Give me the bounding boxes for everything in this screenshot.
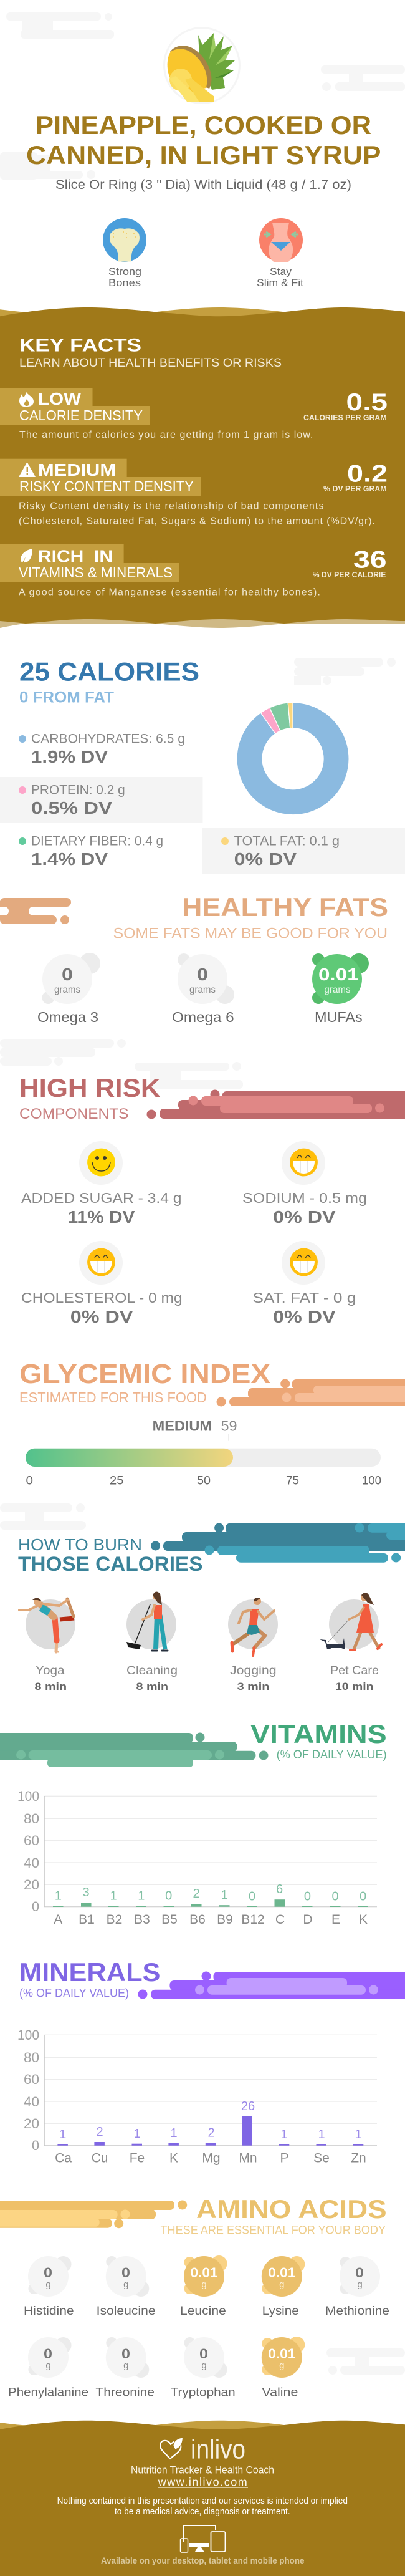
legend: carbohydrates xyxy=(19,732,185,766)
fact: rich in vitamins and minerals: % DV PER CALORIE xyxy=(313,571,386,579)
metric: omega 6: grams xyxy=(189,985,216,995)
metric: mufas: grams xyxy=(324,985,350,995)
metric: mufas xyxy=(312,953,369,1025)
gauge chart: 75 xyxy=(286,1474,299,1488)
metric: valine: 0.01 xyxy=(268,2346,295,2361)
activity label: cleaning: 8 min xyxy=(136,1681,168,1692)
metric: lysine: 0.01 xyxy=(268,2265,295,2280)
metric: methionine: g xyxy=(357,2279,363,2290)
gauge chart: 100 xyxy=(362,1474,381,1488)
bar chart: minerals: Cu xyxy=(92,2151,108,2166)
metric: threonine xyxy=(95,2337,155,2400)
heading xyxy=(19,1957,161,2000)
activity: cleaning xyxy=(126,1591,176,1651)
bar chart: minerals: 0 xyxy=(32,2138,39,2153)
bar chart: minerals: 1 xyxy=(318,2128,325,2141)
bar chart: minerals: 2 xyxy=(96,2125,103,2139)
heading xyxy=(161,2194,387,2237)
bar chart: vitamins: A xyxy=(54,1913,62,1927)
metric: methionine: 0 xyxy=(355,2265,364,2280)
bar chart: minerals: 1 xyxy=(280,2128,288,2141)
decoration: swoosh xyxy=(0,898,71,924)
tagline and url: www.inlivo.com xyxy=(158,2476,247,2489)
legend: protein xyxy=(19,783,125,818)
bar chart: minerals: Se xyxy=(313,2151,330,2166)
bar chart: minerals: 80 xyxy=(24,2050,39,2065)
metric: tryptophan xyxy=(171,2337,236,2400)
heading: MINERALS xyxy=(19,1957,161,1987)
metric: valine xyxy=(262,2337,305,2400)
panel: minerals xyxy=(17,1957,405,2166)
metric: threonine: 0 xyxy=(122,2346,130,2361)
item: cholesterol: CHOLESTEROL - 0 mg xyxy=(21,1290,183,1306)
disclaimer xyxy=(57,2496,348,2517)
bar chart: vitamins: 0 xyxy=(32,1899,39,1914)
bar chart: vitamins: 2 xyxy=(193,1887,200,1901)
bar chart: vitamins: 40 xyxy=(24,1855,39,1871)
heading: HIGH RISK xyxy=(19,1073,161,1102)
metric: histidine xyxy=(24,2256,74,2318)
decoration: swoosh xyxy=(217,1379,405,1407)
bar chart: vitamins: B12 xyxy=(241,1913,265,1927)
icon: devices xyxy=(181,2525,226,2552)
panel: how to burn those calories xyxy=(18,1523,405,1692)
icon: warning triangle xyxy=(19,462,36,477)
donut chart xyxy=(237,703,349,815)
legend: dietary fiber: DIETARY FIBER: 0.4 g xyxy=(31,834,163,849)
metric: omega 3 xyxy=(37,953,100,1025)
heading: SOME FATS MAY BE GOOD FOR YOU xyxy=(113,925,388,942)
activity label: yoga: Yoga xyxy=(36,1664,65,1677)
decoration: swoosh xyxy=(138,1972,405,1999)
panel: key facts xyxy=(0,307,405,628)
legend: dietary fiber xyxy=(19,834,163,869)
bar chart: vitamins: B6 xyxy=(189,1913,206,1927)
bar chart: vitamins: D xyxy=(303,1913,313,1927)
heading: COMPONENTS xyxy=(19,1106,128,1122)
metric: lysine xyxy=(262,2256,305,2318)
fact: low calorie density: 0.5 xyxy=(346,389,388,416)
metric: phenylalanine: Phenylalanine xyxy=(8,2386,88,2400)
metric: tryptophan: 0 xyxy=(199,2346,208,2361)
bar chart: minerals: Mg xyxy=(202,2151,221,2166)
metric: leucine: g xyxy=(201,2279,207,2290)
metric: threonine: g xyxy=(123,2360,128,2371)
legend: carbohydrates: 1.9% DV xyxy=(31,747,108,766)
bar chart: vitamins: K xyxy=(359,1913,368,1927)
icon: slim waist xyxy=(259,218,303,262)
metric: omega 3: grams xyxy=(54,985,80,995)
activity label: jogging: 3 min xyxy=(237,1681,269,1692)
panel: healthy fats xyxy=(0,892,388,1025)
icon: pineapple photo xyxy=(163,27,241,104)
icon: flame xyxy=(19,391,34,407)
fact: low calorie density xyxy=(0,388,388,440)
bar chart: minerals: Ca xyxy=(55,2151,72,2166)
bar chart: minerals: 40 xyxy=(24,2094,39,2110)
metric: tryptophan: g xyxy=(201,2360,207,2371)
item: added sugar: 11% DV xyxy=(68,1207,135,1227)
metric: mufas: 0.01 xyxy=(318,965,359,984)
item: cholesterol: 0% DV xyxy=(70,1307,133,1326)
heading xyxy=(19,1359,270,1406)
heading: (% OF DAILY VALUE) xyxy=(277,1749,387,1762)
metric: isoleucine: 0 xyxy=(122,2265,130,2280)
heading xyxy=(19,657,199,707)
bar chart: minerals: 60 xyxy=(24,2072,39,2087)
availability note: Available on your desktop, tablet and mobile phone xyxy=(101,2555,305,2565)
bar chart: vitamins: 1 xyxy=(138,1889,145,1903)
label: Stay xyxy=(270,266,292,277)
heading: AMINO ACIDS xyxy=(196,2194,387,2224)
bar chart: minerals: 26 xyxy=(241,2100,255,2113)
bar chart: minerals: Fe xyxy=(130,2151,145,2166)
metric: isoleucine: g xyxy=(123,2279,128,2290)
bar chart: vitamins: C xyxy=(275,1913,285,1927)
disclaimer: to be a medical advice, diagnosis or treatment. xyxy=(115,2507,290,2517)
activity: yoga xyxy=(19,1598,75,1652)
heading: HOW TO BURN xyxy=(18,1535,142,1554)
gauge chart: 25 xyxy=(110,1474,124,1488)
decoration: swoosh xyxy=(0,1732,268,1767)
gauge chart: 0 xyxy=(26,1474,33,1488)
fact: rich in vitamins and minerals: VITAMINS & MINERALS xyxy=(19,564,173,581)
gauge chart: MEDIUM xyxy=(153,1418,212,1434)
metric: valine: Valine xyxy=(262,2386,298,2400)
bar chart: vitamins: 0 xyxy=(304,1890,311,1904)
heading: VITAMINS xyxy=(250,1719,387,1749)
bar chart: minerals: 1 xyxy=(355,2128,362,2141)
bar chart: minerals: 1 xyxy=(59,2128,66,2141)
decoration: swoosh xyxy=(151,1523,405,1563)
icon: bone xyxy=(103,218,146,262)
metric: valine: g xyxy=(279,2360,284,2371)
item: cholesterol xyxy=(21,1241,183,1326)
bar chart: vitamins: B5 xyxy=(161,1913,178,1927)
item: sodium: SODIUM - 0.5 mg xyxy=(242,1190,367,1206)
gauge chart: 50 xyxy=(197,1474,211,1488)
bar chart: vitamins: 1 xyxy=(221,1888,228,1902)
bar chart: vitamins: 0 xyxy=(165,1889,172,1903)
fact: medium risky content density xyxy=(0,459,388,527)
heading: ESTIMATED FOR THIS FOOD xyxy=(19,1389,207,1406)
panel: calories xyxy=(0,657,405,874)
title: PINEAPPLE, COOKED OR xyxy=(36,110,371,140)
heading: LEARN ABOUT HEALTH BENEFITS OR RISKS xyxy=(19,357,282,370)
fact: low calorie density: CALORIE DENSITY xyxy=(19,407,143,423)
bar chart: vitamins: 100 xyxy=(17,1788,39,1804)
bar chart: vitamins: 60 xyxy=(24,1833,39,1848)
footer panel xyxy=(0,2421,405,2576)
label: Strong xyxy=(108,266,141,277)
metric: mufas: MUFAs xyxy=(315,1009,363,1025)
legend: protein: 0.5% DV xyxy=(31,798,112,818)
activity label: cleaning xyxy=(126,1664,178,1692)
bar chart: minerals: 20 xyxy=(24,2116,39,2131)
metric: threonine: Threonine xyxy=(95,2386,155,2400)
activity label: pet care: Pet Care xyxy=(330,1664,379,1677)
fact: low calorie density: LOW xyxy=(38,389,82,408)
fact: rich in vitamins and minerals: 36 xyxy=(353,547,387,574)
item: saturated fat xyxy=(253,1241,356,1326)
bar chart: minerals xyxy=(17,2027,377,2166)
fact: low calorie density: CALORIES PER GRAM xyxy=(303,413,387,422)
activity label: jogging: Jogging xyxy=(230,1664,277,1677)
fact: medium risky content density: Risky Content density is the relationship of bad components xyxy=(19,501,324,512)
logo: inlivo xyxy=(191,2434,245,2465)
heading: THESE ARE ESSENTIAL FOR YOUR BODY xyxy=(161,2224,386,2237)
bar chart: vitamins xyxy=(17,1788,377,1927)
bar chart: vitamins: 0 xyxy=(249,1890,255,1904)
legend: carbohydrates: CARBOHYDRATES: 6.5 g xyxy=(31,732,185,746)
metric: histidine: g xyxy=(45,2279,51,2290)
panel: glycemic index xyxy=(19,1359,405,1488)
metric: leucine xyxy=(180,2255,227,2318)
metric: histidine: Histidine xyxy=(24,2305,74,2318)
bar chart: minerals: 2 xyxy=(207,2126,215,2140)
bar chart: minerals: 100 xyxy=(17,2027,39,2043)
heading: 25 CALORIES xyxy=(19,657,199,687)
metric: isoleucine xyxy=(97,2256,156,2318)
fact: medium risky content density: MEDIUM xyxy=(38,460,116,480)
metric: histidine: 0 xyxy=(44,2265,52,2280)
metric: omega 3: 0 xyxy=(62,965,73,984)
heading xyxy=(19,335,282,370)
bar chart: minerals: K xyxy=(169,2151,178,2166)
fact: medium risky content density: % DV PER GRAM xyxy=(323,485,387,493)
bar chart: vitamins: 20 xyxy=(24,1877,39,1893)
heading xyxy=(18,1535,203,1575)
fact: medium risky content density: (Cholesterol, Saturated Fat, Sugars & Sodium) to the amount (%DV/gr). xyxy=(19,516,375,527)
activity label: yoga: 8 min xyxy=(35,1681,67,1692)
bar chart: minerals: 1 xyxy=(170,2126,178,2140)
metric: phenylalanine xyxy=(8,2337,88,2400)
heading xyxy=(113,892,388,942)
activity label: jogging xyxy=(230,1664,277,1692)
bar chart: vitamins: B9 xyxy=(217,1913,233,1927)
label xyxy=(257,266,303,289)
item: sodium: 0% DV xyxy=(273,1207,336,1227)
bar chart: vitamins: 6 xyxy=(276,1883,283,1896)
legend: total fat xyxy=(221,834,340,869)
panel: amino acids xyxy=(0,2194,389,2400)
decoration: swoosh xyxy=(147,1090,405,1119)
panel: vitamins xyxy=(0,1719,387,1927)
heading xyxy=(250,1719,387,1762)
item: sodium xyxy=(242,1141,367,1227)
metric: methionine xyxy=(325,2256,389,2318)
fact: low calorie density: The amount of calories you are getting from 1 gram is low. xyxy=(19,430,313,440)
fact: rich in vitamins and minerals: A good source of Manganese (essential for healthy bones). xyxy=(19,587,320,598)
bar chart: vitamins: 0 xyxy=(331,1890,339,1904)
fact: medium risky content density: RISKY CONTENT DENSITY xyxy=(19,478,194,494)
legend: total fat: 0% DV xyxy=(234,849,297,869)
activity label: yoga xyxy=(35,1664,67,1692)
heading: 0 FROM FAT xyxy=(19,689,114,707)
bar chart: vitamins: B3 xyxy=(134,1913,150,1927)
fact: rich in vitamins and minerals xyxy=(0,544,387,598)
item: saturated fat: SAT. FAT - 0 g xyxy=(253,1290,356,1306)
metric: lysine: g xyxy=(279,2279,284,2290)
item: added sugar xyxy=(21,1141,182,1227)
benefit: strong bones xyxy=(103,218,146,289)
label: Slim & Fit xyxy=(257,277,303,289)
metric: phenylalanine: 0 xyxy=(44,2346,52,2361)
metric: omega 3: Omega 3 xyxy=(37,1009,98,1025)
metric: tryptophan: Tryptophan xyxy=(171,2386,236,2400)
activity label: pet care: 10 min xyxy=(335,1681,374,1692)
bar chart: minerals: 1 xyxy=(133,2127,141,2141)
bar chart: vitamins: 3 xyxy=(82,1886,90,1899)
activity: jogging xyxy=(228,1598,278,1656)
activity label: cleaning: Cleaning xyxy=(126,1664,178,1677)
heading: HEALTHY FATS xyxy=(182,892,388,922)
bar chart: minerals: Zn xyxy=(351,2151,366,2166)
bar chart: vitamins: E xyxy=(331,1913,340,1927)
title xyxy=(26,110,381,170)
metric: lysine: Lysine xyxy=(262,2305,299,2318)
legend: dietary fiber: 1.4% DV xyxy=(31,849,108,869)
item: added sugar: ADDED SUGAR - 3.4 g xyxy=(21,1190,182,1206)
heading: (% OF DAILY VALUE) xyxy=(19,1987,129,2000)
legend: total fat: TOTAL FAT: 0.1 g xyxy=(234,834,340,849)
bar chart: vitamins: 80 xyxy=(24,1811,39,1826)
header: food photo and title xyxy=(26,27,381,192)
activity label: pet care xyxy=(330,1664,379,1692)
metric: omega 6: Omega 6 xyxy=(172,1009,234,1025)
metric: omega 6 xyxy=(172,953,234,1025)
label xyxy=(108,266,141,289)
heading: GLYCEMIC INDEX xyxy=(19,1359,270,1389)
gauge chart: 59 xyxy=(221,1418,237,1434)
metric: methionine: Methionine xyxy=(325,2305,389,2318)
tagline and url: Nutrition Tracker & Health Coach xyxy=(131,2464,274,2476)
fact: rich in vitamins and minerals: RICH IN xyxy=(38,547,113,566)
legend: protein: PROTEIN: 0.2 g xyxy=(31,783,125,798)
decoration: swoosh xyxy=(0,2200,187,2228)
title: CANNED, IN LIGHT SYRUP xyxy=(26,140,381,170)
metric: leucine: Leucine xyxy=(180,2305,226,2318)
bar chart: vitamins: 1 xyxy=(110,1889,117,1903)
icon: leaf xyxy=(21,549,32,562)
bar chart: vitamins: B1 xyxy=(79,1913,95,1927)
serving size subtitle: Slice Or Ring (3 " Dia) With Liquid (48 g / 1.7 oz) xyxy=(55,178,351,192)
logo xyxy=(160,2434,245,2465)
bar chart: minerals: P xyxy=(280,2151,289,2166)
item: saturated fat: 0% DV xyxy=(273,1307,336,1326)
metric: leucine: 0.01 xyxy=(191,2265,218,2280)
tagline and url xyxy=(131,2464,274,2489)
metric: omega 6: 0 xyxy=(197,965,208,984)
heading xyxy=(19,1073,161,1122)
metric: phenylalanine: g xyxy=(45,2360,51,2371)
metric: isoleucine: Isoleucine xyxy=(97,2305,156,2318)
heading: KEY FACTS xyxy=(19,335,141,355)
disclaimer: Nothing contained in this presentation and our services is intended or implied xyxy=(57,2496,348,2506)
fact: medium risky content density: 0.2 xyxy=(347,461,388,488)
bar chart: vitamins: 0 xyxy=(360,1890,366,1904)
bar chart: minerals: Mn xyxy=(239,2151,257,2166)
heading: THOSE CALORIES xyxy=(18,1553,203,1575)
label: Bones xyxy=(108,277,141,289)
panel: high risk components xyxy=(19,1073,405,1326)
bar chart: vitamins: B2 xyxy=(107,1913,122,1927)
activity: pet care xyxy=(320,1593,381,1650)
gauge chart xyxy=(26,1418,381,1488)
bar chart: vitamins: 1 xyxy=(55,1889,62,1903)
benefit: stay slim and fit xyxy=(257,218,303,289)
